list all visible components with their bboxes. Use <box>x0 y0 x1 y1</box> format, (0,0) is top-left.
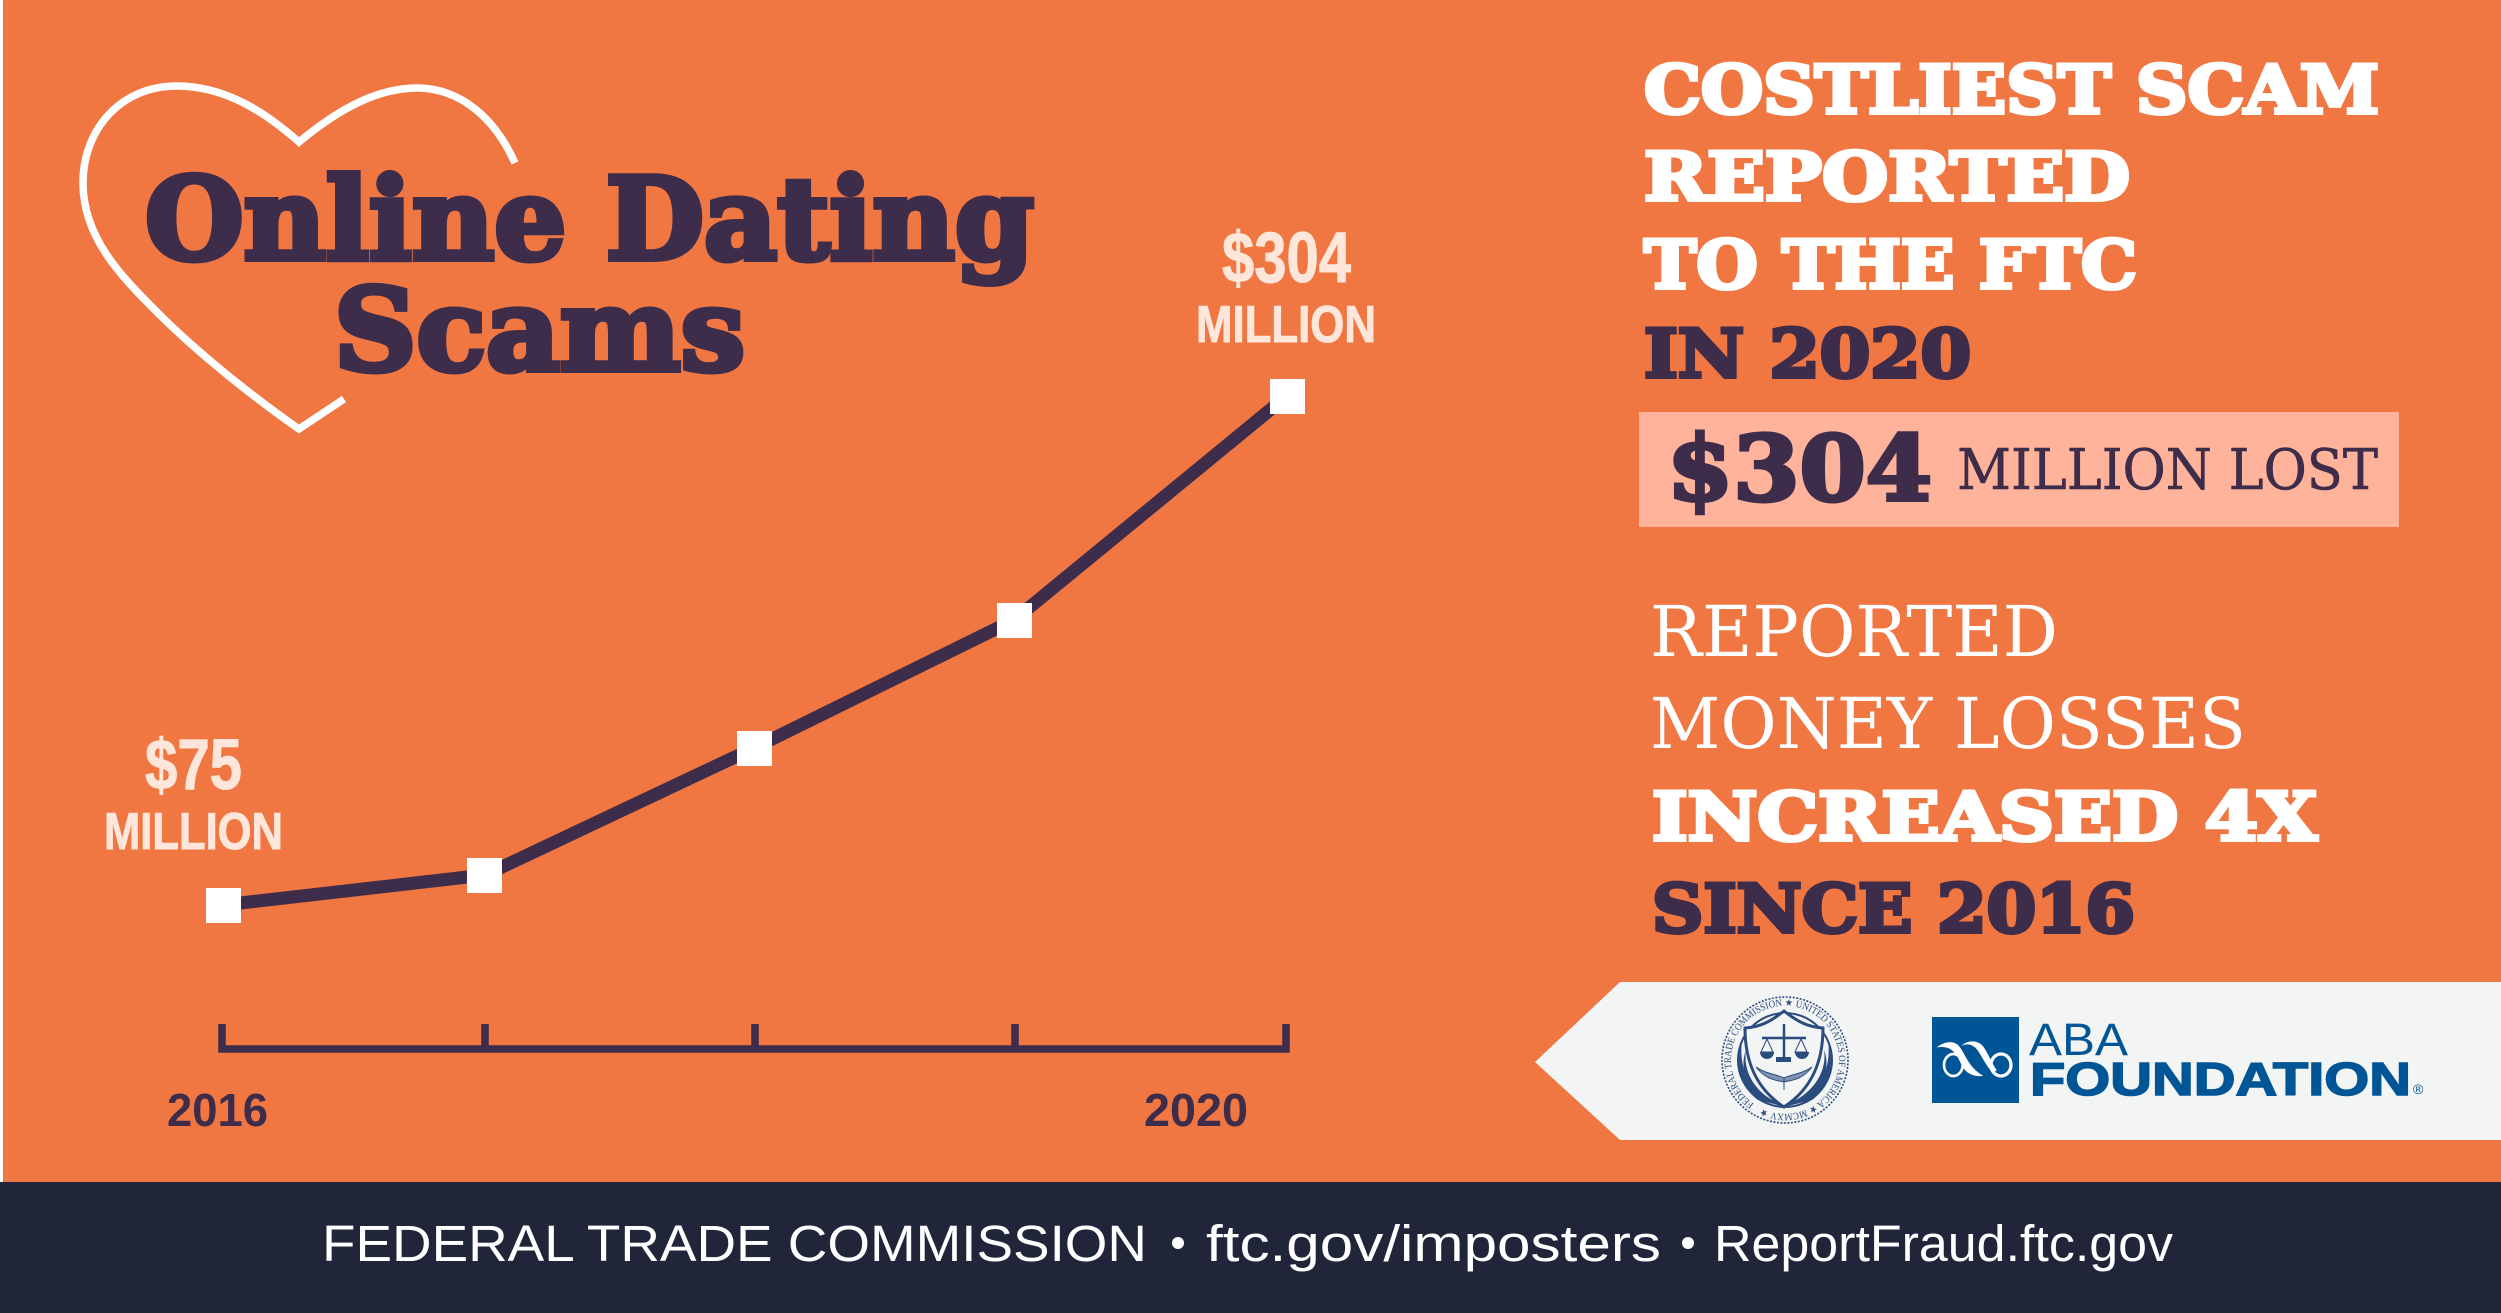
logo text: ABA Foundation: ABA <box>2029 1014 2128 1065</box>
callout amount: $304 <box>1667 416 1932 522</box>
text block: losses increased: MONEY LOSSES <box>1650 683 2246 765</box>
text block: losses increased <box>1650 591 2318 948</box>
chart line <box>223 396 1287 905</box>
callout: $304 million lost <box>1639 412 2399 527</box>
footer text: FEDERAL TRADE COMMISSION <box>322 1215 1147 1272</box>
axis label 2016: 2016 <box>167 1084 268 1136</box>
heading: costliest scam: TO THE FTC <box>1644 226 2137 304</box>
end value label: $304 <box>1222 219 1351 298</box>
title: Scams <box>334 264 745 397</box>
logo text: ABA Foundation: ® <box>2413 1081 2424 1097</box>
text block: losses increased: SINCE 2016 <box>1652 870 2135 948</box>
panel: logo banner <box>1535 982 2501 1140</box>
callout unit: MILLION LOST <box>1957 438 2378 503</box>
heading: costliest scam: REPORTED <box>1644 138 2130 216</box>
icon: heart outline <box>83 86 515 429</box>
axis label 2020: 2020 <box>1144 1084 1248 1136</box>
start value label <box>104 726 283 861</box>
text block: losses increased: INCREASED 4X <box>1652 778 2318 856</box>
x axis <box>222 1024 1286 1049</box>
data points <box>206 379 1305 923</box>
end value label: MILLION <box>1196 296 1376 354</box>
heading: costliest scam <box>1644 51 2379 393</box>
heading: costliest scam: IN 2020 <box>1644 315 1971 393</box>
icon: FTC seal: FEDERAL TRADE COMMISSION ★ UNITED STATES OF AMERICA ★ MCMXV ★ <box>1724 998 1846 1120</box>
logo text: ABA Foundation: FOUNDATION <box>2030 1053 2411 1105</box>
text block: losses increased: REPORTED <box>1650 591 2058 673</box>
line chart: reported losses 2016 to 2020 <box>104 219 1376 1136</box>
end value label <box>1196 219 1376 354</box>
footer text: ftc.gov/imposters <box>1206 1215 1661 1272</box>
title <box>145 153 1034 397</box>
start value label: $75 <box>145 726 242 805</box>
footer bar <box>0 1182 2501 1313</box>
heading: costliest scam: COSTLIEST SCAM <box>1644 51 2379 129</box>
logo text: ABA Foundation <box>2029 1014 2424 1105</box>
footer text <box>322 1215 2173 1272</box>
icon: ABA logo mark <box>1932 1017 2019 1103</box>
start value label: MILLION <box>104 803 283 861</box>
footer text: ReportFraud.ftc.gov <box>1714 1215 2173 1272</box>
title: Online Dating <box>145 153 1034 286</box>
